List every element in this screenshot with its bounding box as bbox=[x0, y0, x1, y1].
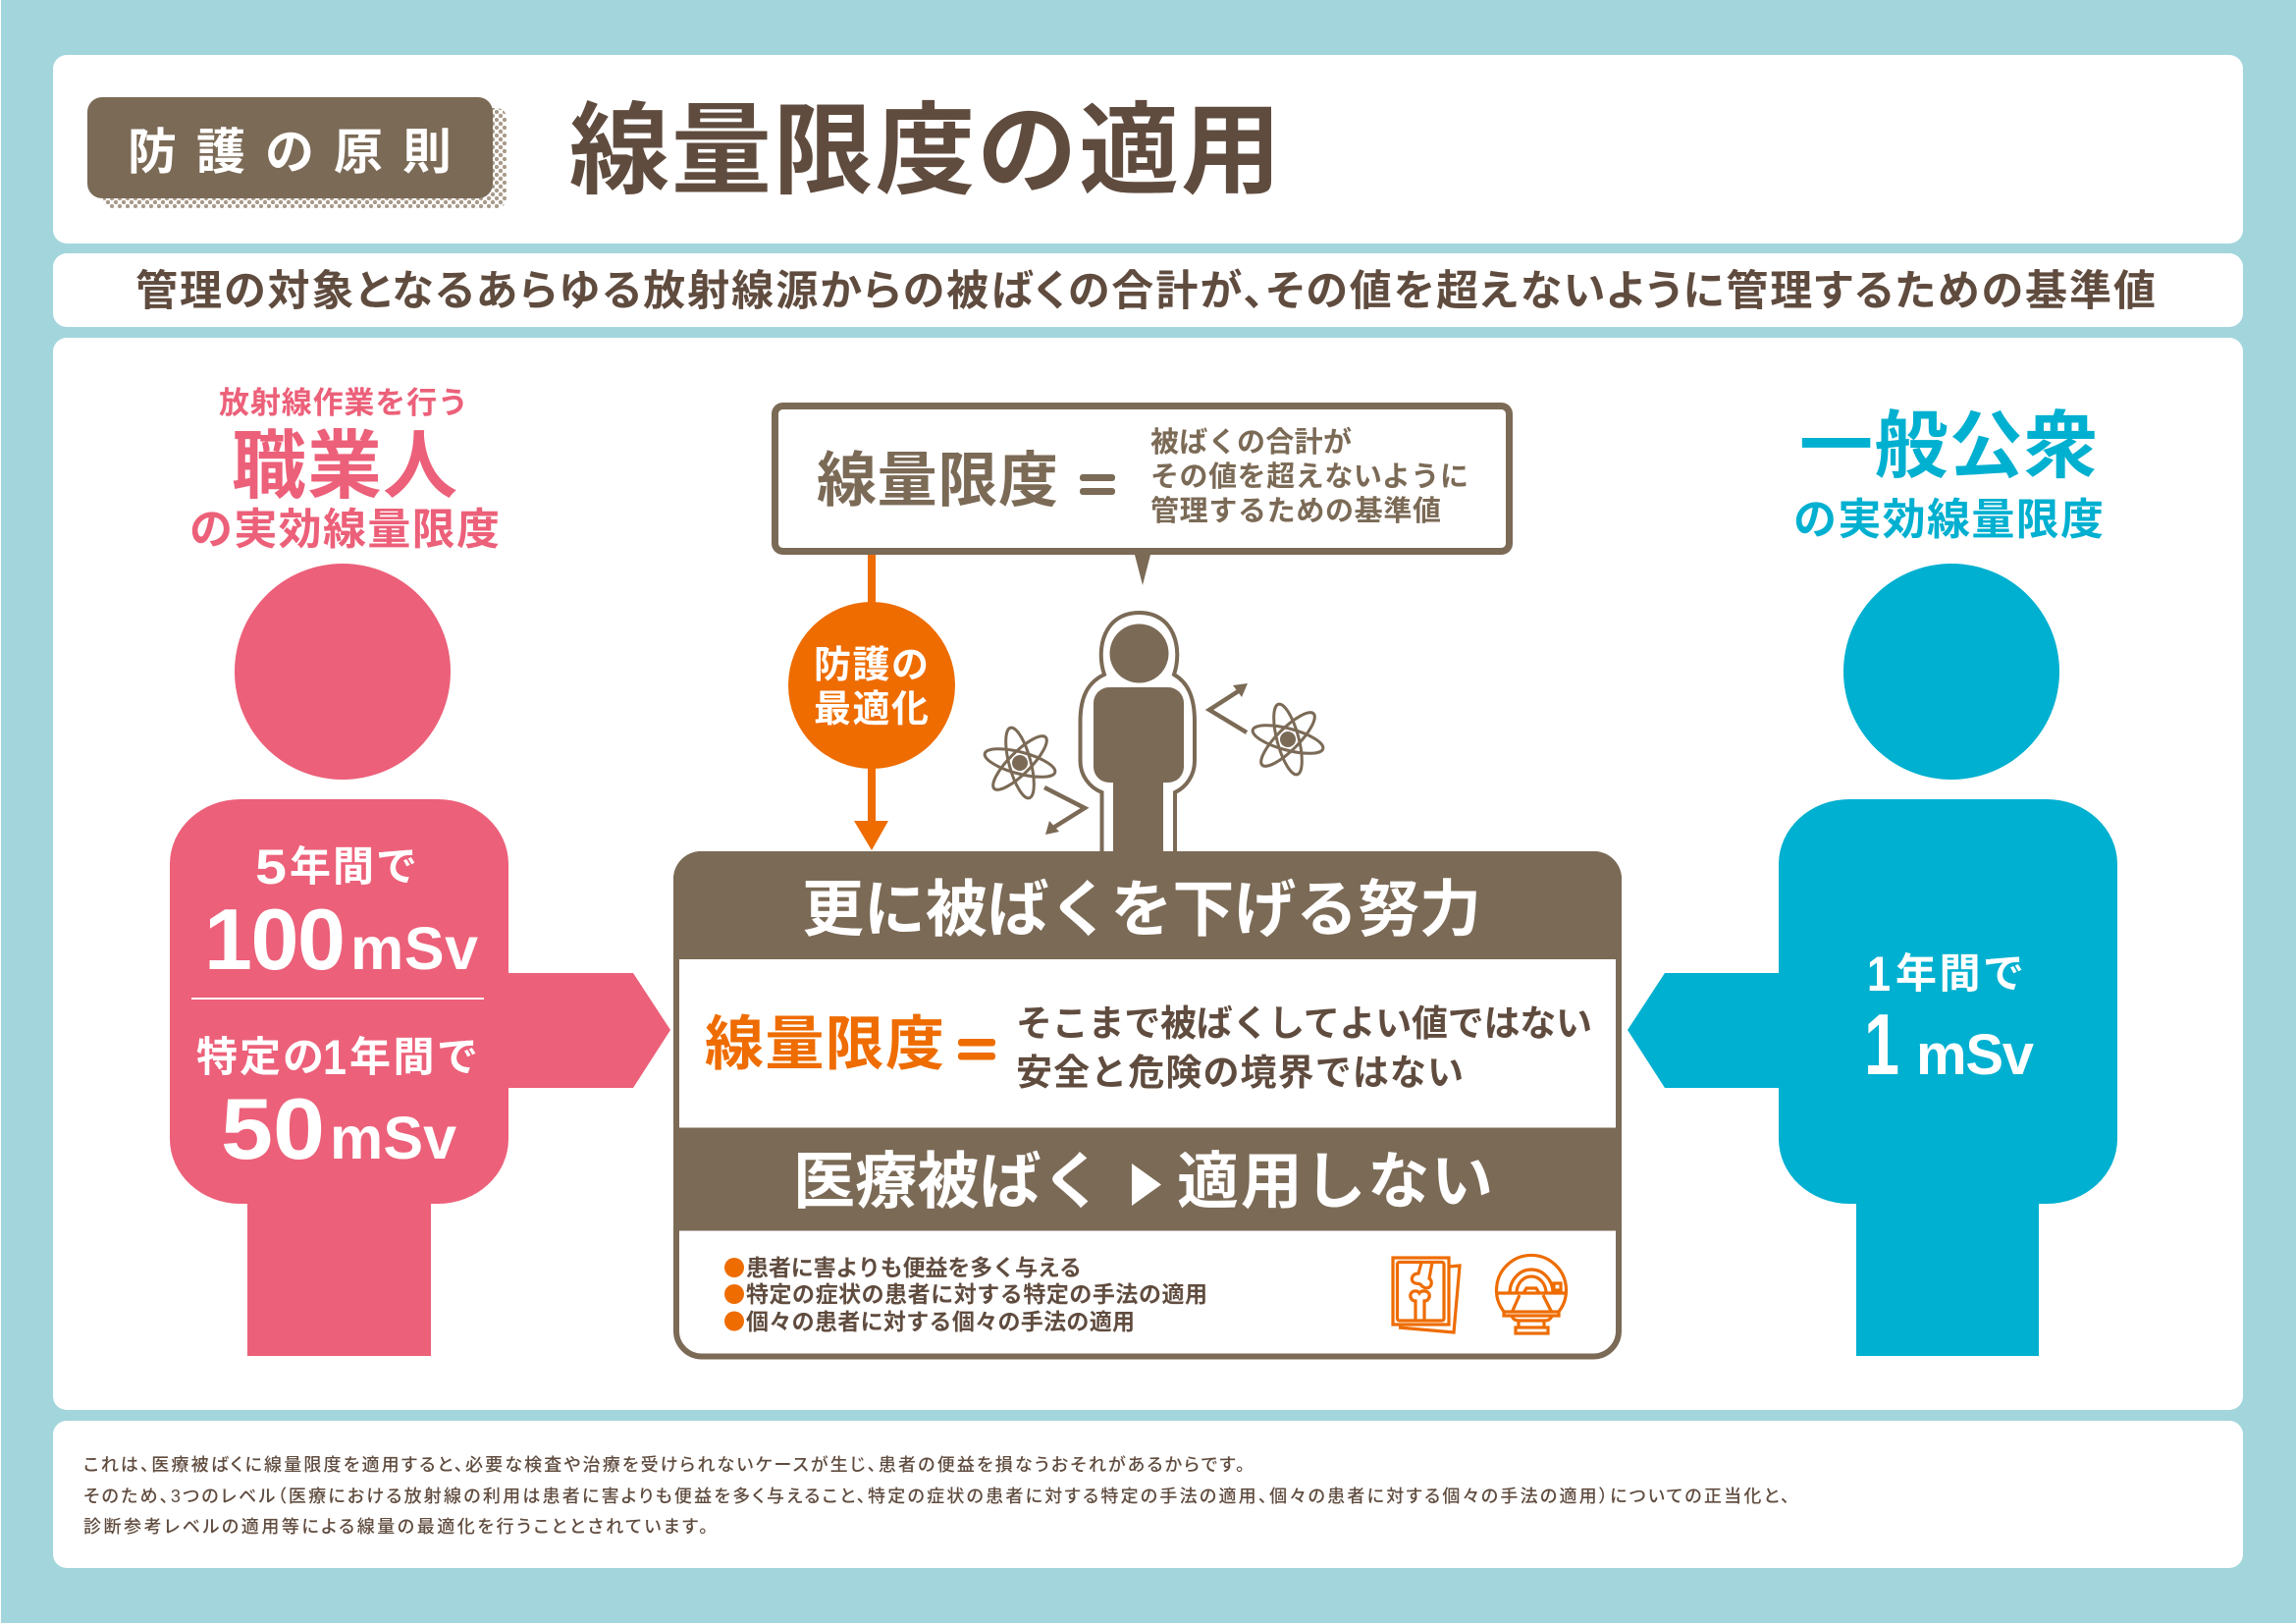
dose: 1 year 50 mSv: 年間で bbox=[349, 1034, 478, 1080]
silhouette: blue person with arrow bbox=[1628, 564, 2117, 1356]
icon: atom right bbox=[1250, 701, 1326, 778]
tag: 防護の原則: 防護の原則 bbox=[128, 125, 452, 180]
orange arrow: optimisation: 最適化 bbox=[814, 689, 929, 731]
statement: dose limit is not a boundary: 線量限度 bbox=[705, 1011, 944, 1077]
panel: footnote bbox=[53, 1421, 2243, 1568]
list: medical principles: 個々の患者に対する個々の手法の適用 bbox=[746, 1309, 1135, 1334]
arrow: deflected right bbox=[1209, 683, 1248, 732]
orange arrow: optimisation: 防護の bbox=[814, 645, 929, 686]
arrow: deflected left bbox=[1044, 787, 1085, 835]
heading: public: 一般公衆 bbox=[1799, 405, 2098, 487]
list: medical principles: 患者に害よりも便益を多く与える bbox=[746, 1255, 1082, 1280]
dose: 1 year 1 mSv: 年間で bbox=[1896, 950, 2024, 997]
tag: 防護の原則 bbox=[87, 97, 507, 208]
dose: 1 year 1 mSv: 1 bbox=[1864, 996, 1899, 1093]
heading: public bbox=[1793, 405, 2104, 544]
statement: dose limit is not a boundary bbox=[705, 1003, 1592, 1093]
orange arrow: optimisation bbox=[788, 555, 955, 850]
dose: 1 year 50 mSv bbox=[196, 1030, 478, 1177]
icon: atom left bbox=[982, 725, 1058, 801]
list: medical principles: 特定の症状の患者に対する特定の手法の適用 bbox=[746, 1281, 1207, 1307]
panel: footnote: 診断参考レベルの適用等による線量の最適化を行うこととされています。 bbox=[83, 1517, 708, 1537]
statement: dose limit is not a boundary: そこまで被ばくしてよい値ではない bbox=[1016, 1003, 1592, 1044]
dose: 1 year 50 mSv: 特定の bbox=[196, 1034, 324, 1080]
panel: main bbox=[53, 338, 2243, 1410]
dose: 1 year 1 mSv bbox=[1864, 947, 2034, 1093]
band: further effort: 更に被ばくを下げる努力 bbox=[802, 876, 1481, 945]
speech box: definition: 管理するための基準値 bbox=[1150, 495, 1441, 527]
silhouette: pink person with arrow bbox=[170, 564, 670, 1356]
panel: footnote: これは、医療被ばくに線量限度を適用すると、必要な検査や治療を受けられないケースが生じ、患者の便益を損なうおそれがあるからです。 bbox=[83, 1454, 1245, 1475]
dose: 5 years 100 mSv: 年間で bbox=[290, 843, 417, 890]
dose: 1 year 1 mSv: 1 bbox=[1867, 947, 1891, 1001]
figure: occupational worker bbox=[170, 386, 670, 1356]
band: further effort bbox=[673, 851, 1622, 959]
title: 線量限度の適用 bbox=[569, 95, 1281, 207]
panel: footnote: そのため、3つのレベル（医療における放射線の利用は患者に害よりも便益を多く与えること、特定の症状の患者に対する特定の手法の適用、個々の患者に対する個々の手法の適用）についての正当化と、 bbox=[83, 1487, 1789, 1506]
band: medical exposure: 医療被ばく bbox=[793, 1148, 1103, 1217]
dose: 5 years 100 mSv: 5 bbox=[255, 839, 287, 894]
figure: person with shield outline bbox=[1080, 613, 1195, 854]
dose: 1 year 50 mSv: mSv bbox=[330, 1105, 456, 1171]
panel: header bbox=[53, 55, 2243, 244]
heading: occupational: 放射線作業を行う bbox=[219, 386, 468, 420]
speech box: definition: 被ばくの合計が bbox=[1150, 425, 1352, 459]
icon: x-ray film bbox=[1393, 1258, 1460, 1332]
heading: public: の実効線量限度 bbox=[1793, 496, 2104, 544]
statement: dose limit is not a boundary: 安全と危険の境界ではない bbox=[1016, 1053, 1464, 1093]
dose: 5 years 100 mSv: 100 bbox=[204, 891, 346, 988]
list: medical principles bbox=[724, 1255, 1207, 1334]
speech box: definition: 線量限度 bbox=[817, 447, 1058, 514]
dose: 1 year 50 mSv: 50 bbox=[221, 1080, 325, 1177]
dose: 5 years 100 mSv: mSv bbox=[350, 915, 478, 982]
panel: reduction effort box bbox=[673, 851, 1622, 1357]
heading: occupational: の実効線量限度 bbox=[189, 506, 500, 554]
band: medical exposure bbox=[673, 1127, 1622, 1231]
icon: ct scanner bbox=[1496, 1255, 1567, 1333]
speech box: definition bbox=[775, 406, 1510, 585]
dose: 1 year 50 mSv: 1 bbox=[323, 1030, 347, 1085]
dose: 5 years 100 mSv bbox=[204, 839, 478, 988]
heading: occupational: 職業人 bbox=[232, 425, 457, 509]
dose: 1 year 1 mSv: mSv bbox=[1916, 1023, 2034, 1087]
figure: general public bbox=[1628, 405, 2117, 1356]
panel: definition strip: 管理の対象となるあらゆる放射線源からの被ばくの合計が、その値を超えないように管理するための基準値 bbox=[135, 268, 2156, 315]
speech box: definition: その値を超えないように bbox=[1150, 460, 1468, 493]
panel: definition strip bbox=[53, 253, 2243, 327]
heading: occupational bbox=[189, 386, 500, 554]
band: medical exposure: 適用しない bbox=[1177, 1148, 1493, 1217]
